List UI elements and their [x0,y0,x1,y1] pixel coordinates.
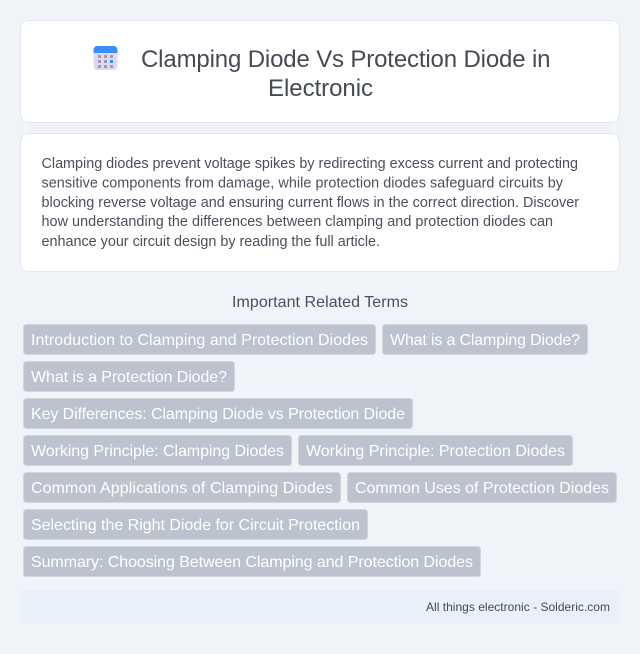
title [141,46,550,102]
tag: Common Uses of Protection Diodes [355,480,609,497]
tag [24,398,412,428]
tag [298,436,572,466]
tag: What is a Protection Diode? [31,369,227,386]
text block: intro paragraph: how understanding the differences between clamping and protection diodes can [42,214,553,230]
footer bar [20,590,620,624]
title: Electronic [268,75,373,102]
tag [24,546,480,576]
tag: Common Applications of Clamping Diodes [31,480,333,497]
tag: Key Differences: Clamping Diode vs Protection Diode [31,406,405,423]
panel: intro summary [20,134,620,272]
text block: intro paragraph: blocking reverse voltage and ensuring current flows in the correct direction. Discover [42,195,579,211]
text block: intro paragraph: sensitive components from damage, while protection diodes safeguard circuits by [42,176,564,192]
tag: Introduction to Clamping and Protection Diodes [31,332,368,349]
panel: title card [20,20,620,122]
icon: calendar grid [94,46,118,70]
footer credit: All things electronic - Solderic.com [426,600,610,614]
tag [24,436,292,466]
text block: intro paragraph [42,156,579,250]
text block: intro paragraph: Clamping diodes prevent voltage spikes by redirecting excess current and protecting [42,156,578,172]
tag: Summary: Choosing Between Clamping and Protection Diodes [31,554,473,571]
tag list [24,324,616,576]
tag: Working Principle: Clamping Diodes [31,443,284,460]
heading: important related terms: Important Related Terms [232,294,408,311]
tag [382,324,588,354]
text block: intro paragraph: enhance your circuit design by reading the full article. [42,234,380,250]
tag [24,510,368,540]
tag: Working Principle: Protection Diodes [306,443,565,460]
tag: Selecting the Right Diode for Circuit Protection [31,517,360,534]
tag: What is a Clamping Diode? [390,332,580,349]
tag [24,324,376,354]
tag [348,472,616,502]
tag [24,472,340,502]
tag [24,362,234,392]
title: Clamping Diode Vs Protection Diode in [141,46,550,73]
